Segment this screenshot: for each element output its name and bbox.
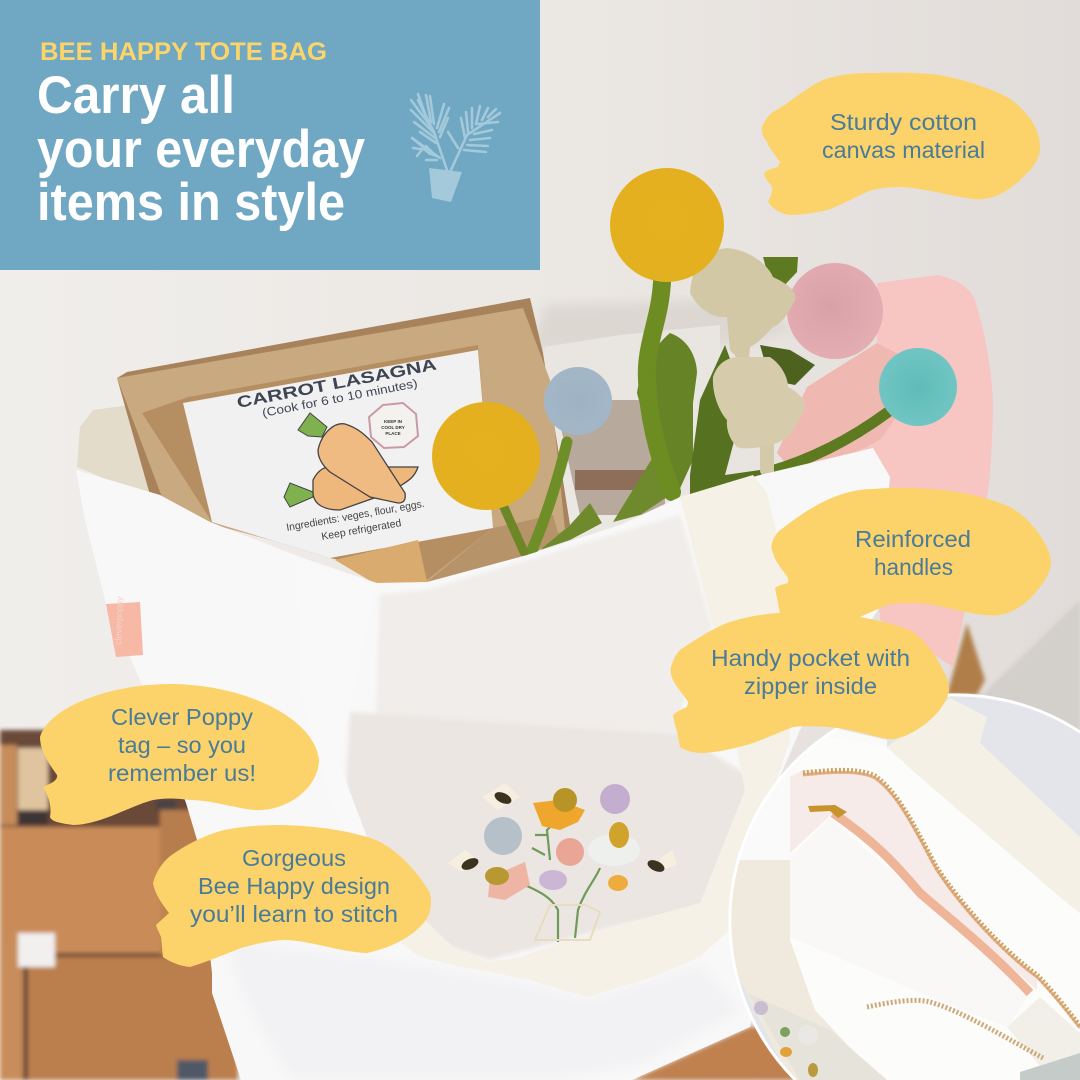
blue felt ball (544, 367, 612, 435)
title: your everyday (37, 120, 365, 179)
callout: clever poppy tag (40, 684, 319, 825)
inner lining of bag (77, 405, 215, 525)
lower beige panel (1007, 997, 1080, 1066)
far side of bag interior (545, 325, 720, 515)
callout: clever poppy tag: tag – so you (118, 732, 246, 758)
panel: title banner (0, 0, 540, 270)
label heading: CARROT LASAGNA (236, 356, 439, 412)
left handle (296, 560, 401, 943)
callout: reinforced handles: Reinforced (855, 526, 971, 552)
stems (503, 282, 888, 552)
bag body (76, 448, 890, 1080)
lower zipper (867, 1000, 1043, 1058)
icon: bees (448, 783, 677, 874)
title: Carry all (37, 66, 235, 125)
clever poppy tag (106, 596, 143, 657)
callout: sturdy cotton: Sturdy cotton (830, 109, 977, 135)
inset embroidered front (748, 993, 887, 1080)
zipper pull (808, 805, 847, 818)
tote bag (76, 448, 890, 1080)
zipper teeth upper (803, 772, 1080, 1028)
shadow on wall behind bag (530, 300, 800, 350)
lower bag shade (225, 940, 740, 1078)
icon: keep cool badge: PLACE (385, 431, 401, 436)
yellow felt ball small (432, 402, 540, 510)
embroidered pocket area (345, 712, 750, 960)
photo background: floor corner (980, 600, 1080, 1080)
icon: potted plant (411, 94, 500, 202)
clever poppy tag: cleverpoppy (113, 596, 125, 645)
label ingredients text: Ingredients: veges, flour, eggs. (285, 498, 425, 534)
callout: handy pocket: Handy pocket with (711, 645, 910, 671)
callout: sturdy cotton (762, 73, 1040, 215)
front kraft bag (142, 345, 493, 580)
inset handle (887, 698, 1080, 913)
title: items in style (37, 173, 345, 232)
callout: bee happy design: Bee Happy design (198, 873, 390, 899)
inset bag interior (790, 735, 1080, 1080)
pink felt ball (787, 263, 883, 359)
title (37, 66, 365, 232)
shredded paper filling (335, 540, 427, 585)
paper pouch (117, 298, 570, 585)
callout: clever poppy tag: Clever Poppy (111, 704, 254, 730)
callout: handy pocket: zipper inside (744, 673, 877, 699)
right handle (401, 475, 790, 997)
callout: clever poppy tag: remember us! (108, 760, 256, 786)
callout: bee happy design: you’ll learn to stitch (190, 901, 398, 927)
yellow felt ball large (610, 168, 724, 282)
icon: keep cool badge: COOL DRY (381, 425, 405, 430)
zipper tape (833, 813, 1030, 993)
callout: handy pocket (671, 612, 949, 753)
bee happy embroidery (448, 783, 677, 942)
callout: reinforced handles (771, 488, 1051, 617)
icon: carrots (284, 413, 418, 510)
leaves (540, 257, 815, 550)
pink knit blanket (777, 275, 993, 667)
back kraft bag (117, 298, 570, 582)
carrot lasagna label (183, 350, 493, 558)
icon: keep cool badge: KEEP IN (384, 419, 402, 424)
embroidery flowers (533, 800, 585, 830)
teal felt ball (879, 348, 957, 426)
inset backdrop (730, 695, 1080, 1080)
beige felt flower lower (713, 357, 805, 448)
callout: sturdy cotton: canvas material (822, 137, 985, 163)
inset left rim (732, 860, 846, 1080)
subtitle: BEE HAPPY TOTE BAG (40, 38, 327, 66)
grey item corner (1020, 1053, 1080, 1080)
pocket opening (790, 770, 1037, 990)
label subheading: (Cook for 6 to 10 minutes) (261, 376, 419, 420)
felt flowers (432, 168, 957, 552)
bag front panel tint (376, 515, 712, 733)
white pocket panel (790, 818, 1030, 1027)
carrot lasagna label: Keep refrigerated (320, 517, 402, 543)
callout: bee happy design (153, 825, 431, 967)
beige felt flower upper (690, 248, 795, 370)
inset photo: zipper pocket (730, 695, 1080, 1080)
embroidery stems (525, 825, 600, 942)
photo background: woven leather mat (0, 623, 985, 1080)
callout: bee happy design: Gorgeous (242, 845, 346, 871)
icon: keep cool badge (369, 403, 418, 448)
inset circle outline (730, 695, 1080, 1080)
callout: reinforced handles: handles (874, 554, 953, 580)
inset upper rim (735, 720, 887, 860)
